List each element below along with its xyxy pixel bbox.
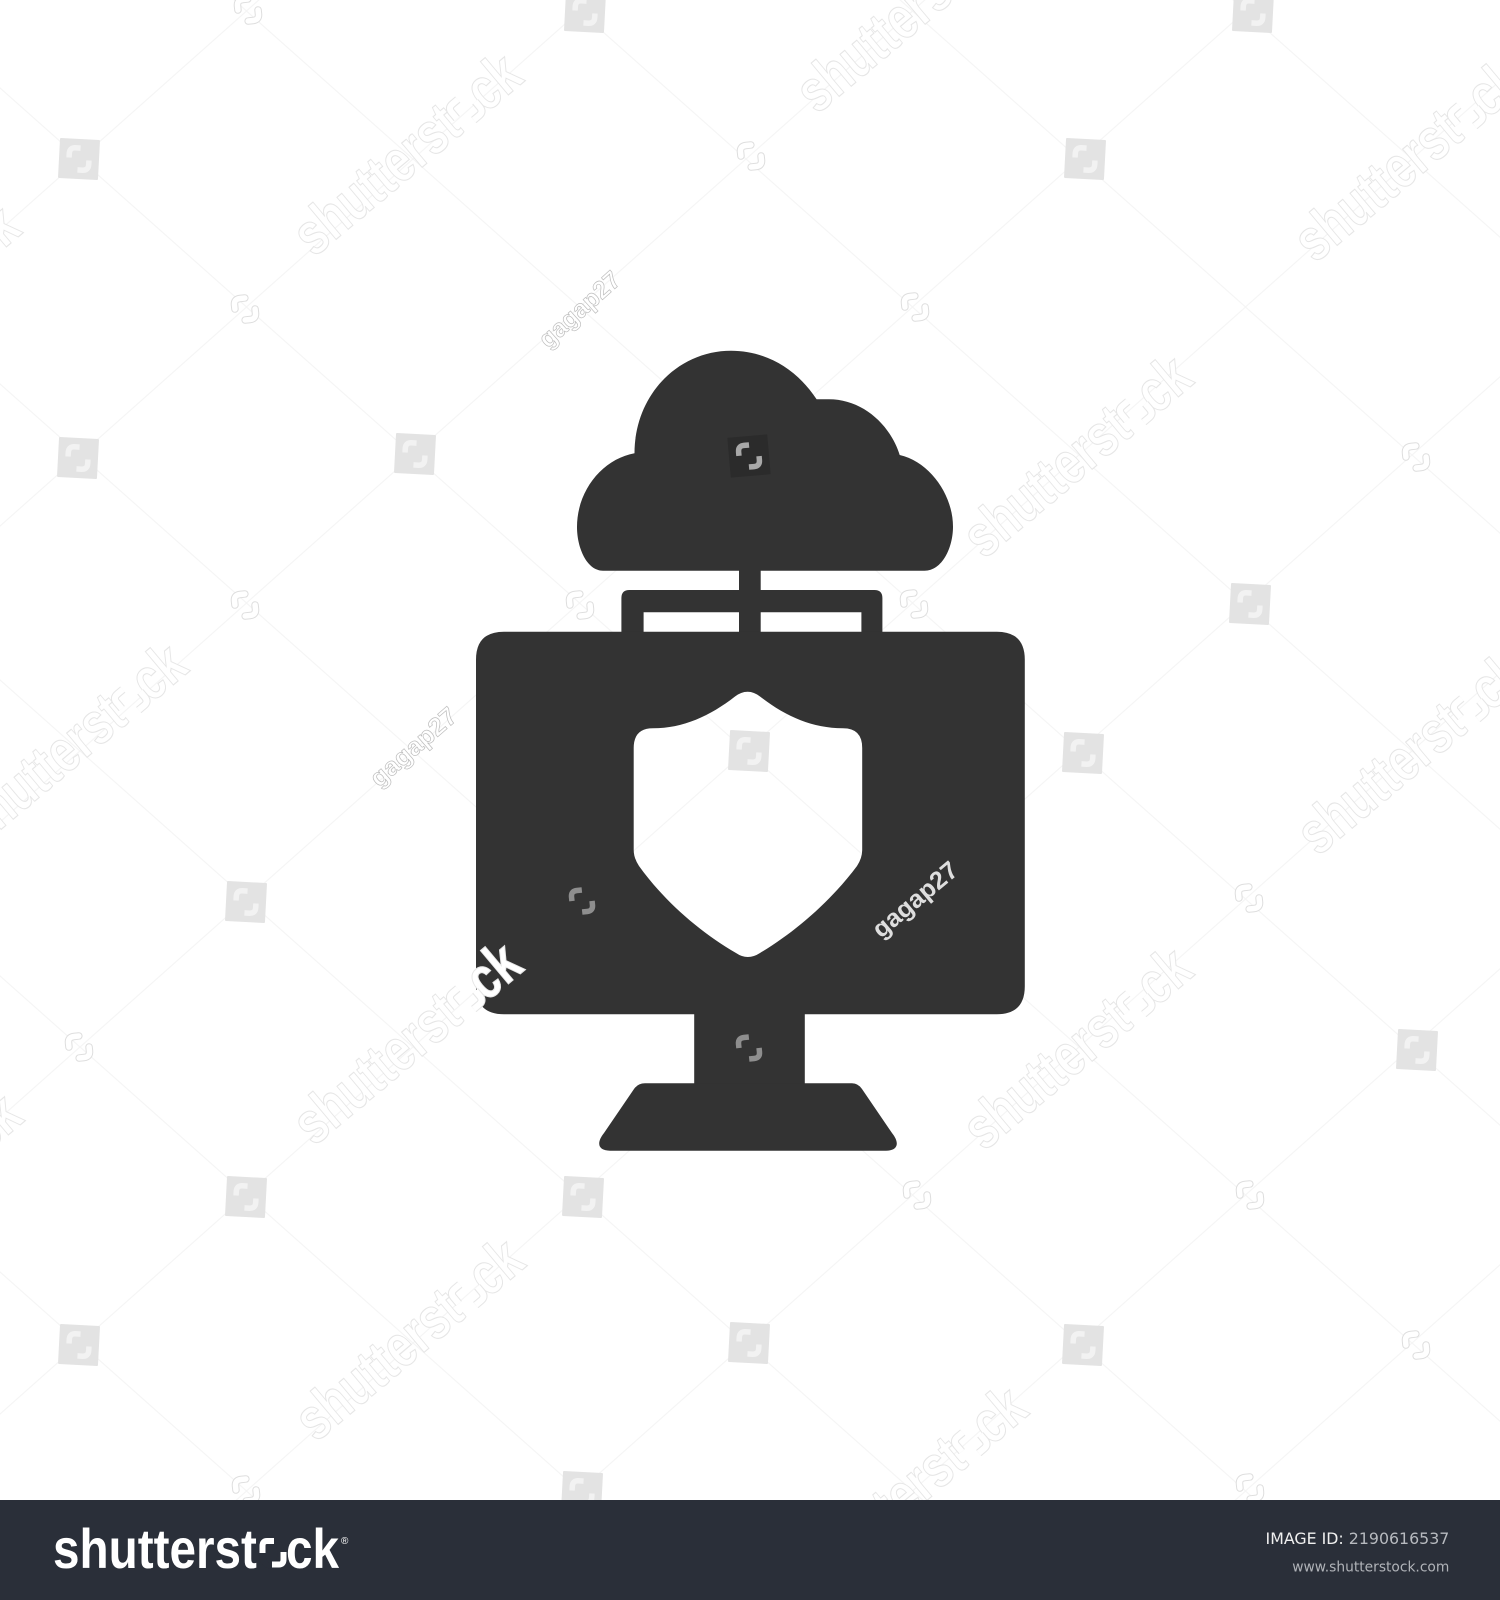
shutterstock logo: shutterstock: [53, 1517, 340, 1580]
watermark: shutterstock 10: shutterstock: [784, 1372, 1039, 1600]
watermark: shutterstock 9: shutterstock: [281, 1224, 536, 1453]
watermark: gagap27 upper: gagap27: [533, 266, 626, 353]
watermark: gagap27 left: gagap27: [365, 702, 463, 793]
icon part: monitor base: [599, 1083, 897, 1151]
shutterstock logo: ®: [341, 1536, 349, 1547]
watermark: shutterstock 4: shutterstock: [949, 341, 1204, 570]
icon part: cloud: [577, 351, 953, 571]
icon: cloud connected to monitor with shield: [476, 351, 1025, 1151]
icon part: monitor stem: [694, 1010, 805, 1086]
image id: IMAGE ID: 2190616537: [1266, 1529, 1449, 1548]
watermark: shutterstock 8: shutterstock: [949, 933, 1204, 1162]
footer bar: [0, 1500, 1500, 1600]
website: www.shutterstock.com: [1292, 1560, 1449, 1576]
icon part: network connector: [621, 570, 882, 632]
watermark: shutterstock 7: shutterstock: [279, 928, 534, 1157]
icon part: monitor screen with shield cut-out: [476, 632, 1025, 1014]
watermark: shutterstock 1: shutterstock: [279, 39, 534, 268]
watermark: gagap27 on monitor: gagap27: [867, 856, 964, 944]
